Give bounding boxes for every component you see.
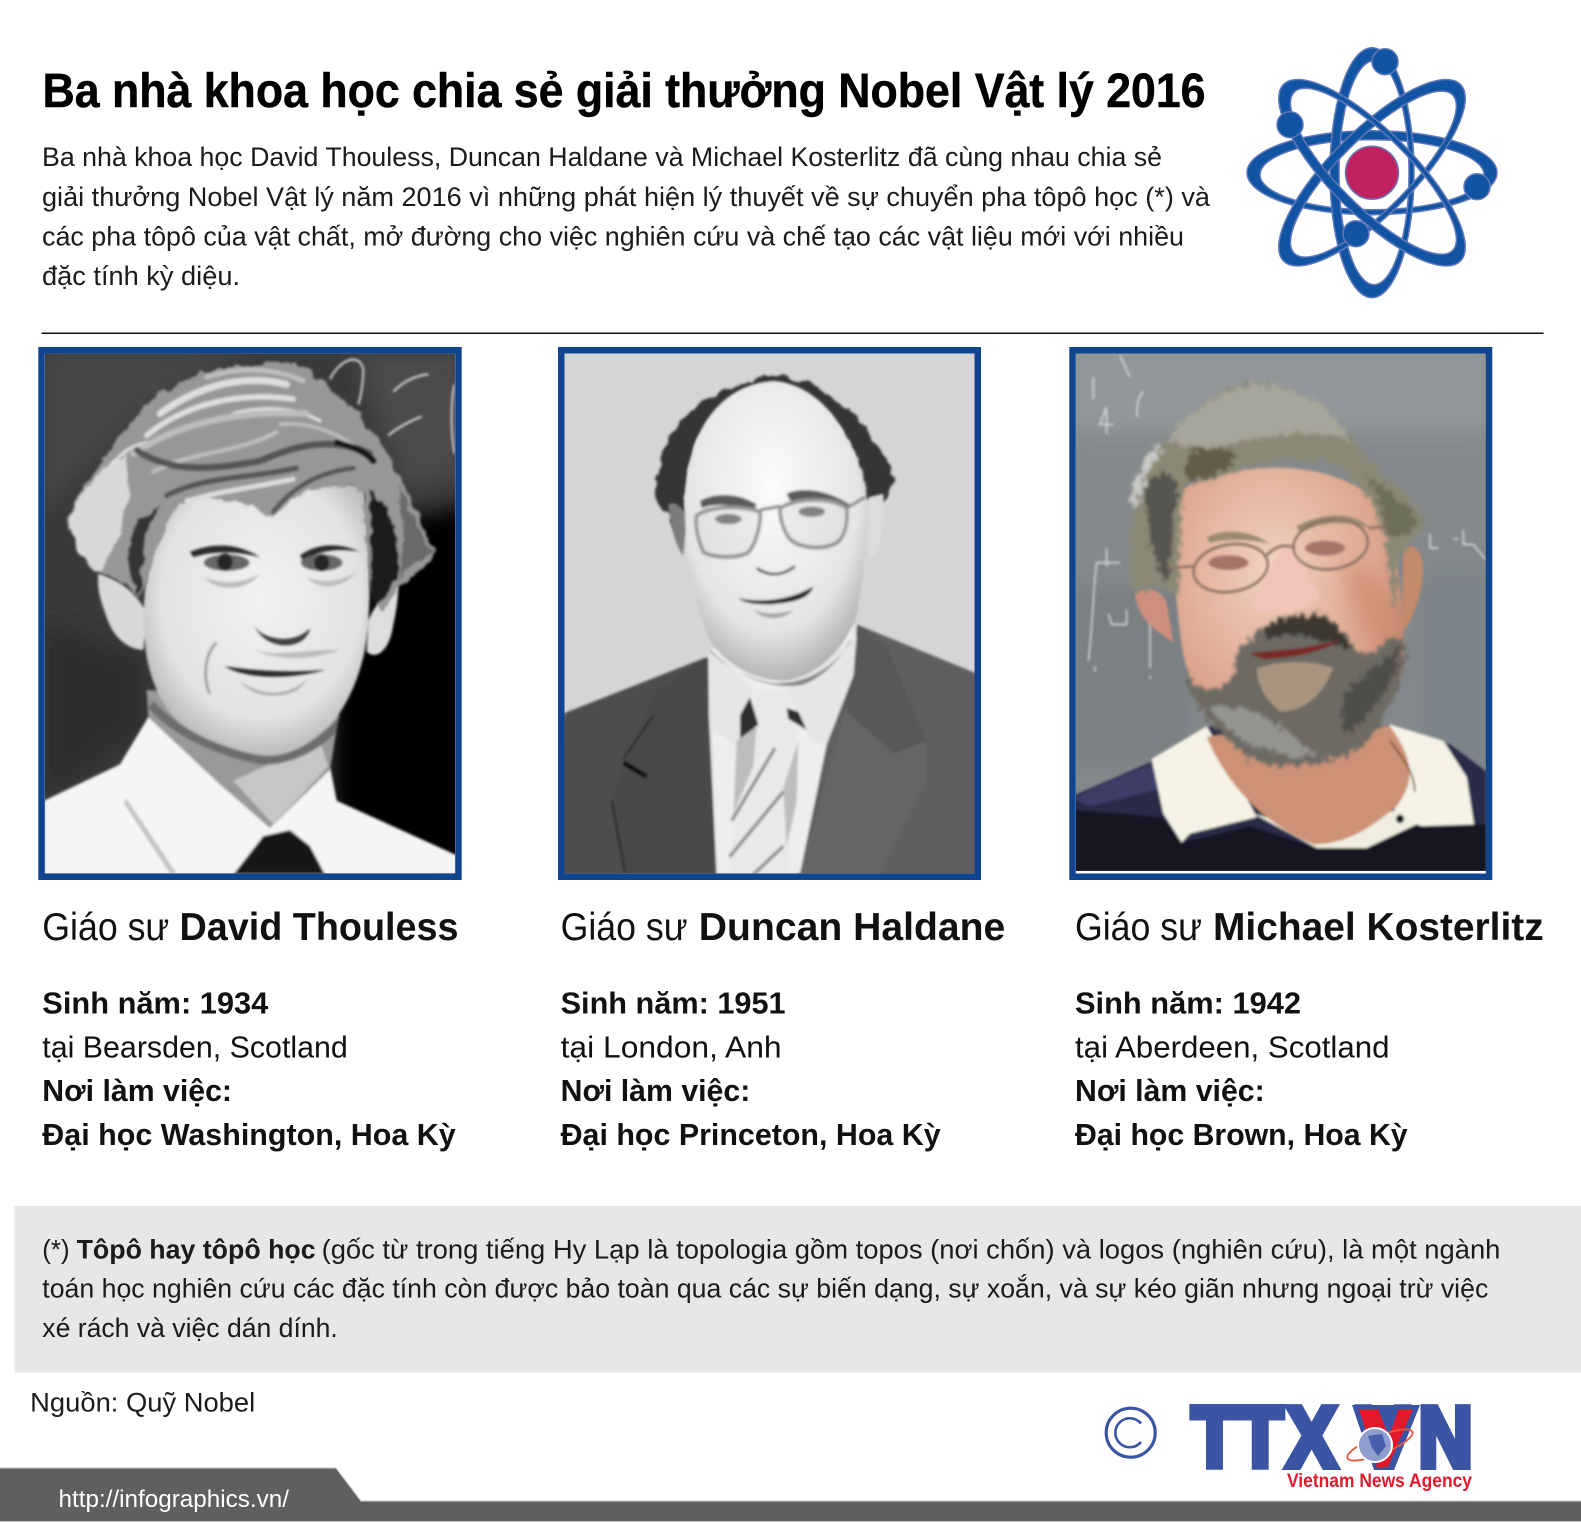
name: Michael Kosterlitz: Michael Kosterlitz	[1213, 906, 1544, 949]
logo V and globe	[1344, 1409, 1416, 1467]
details: Duncan Haldane: tại London, Anh	[561, 1030, 782, 1064]
details: Duncan Haldane: Sinh năm: 1951	[561, 985, 786, 1020]
details: Michael Kosterlitz: Nơi làm việc:	[1075, 1073, 1265, 1108]
note text: (gốc từ trong tiếng Hy Lạp là topologia gồm topos (nơi chốn) và logos (nghiên cứu), là một ngành	[322, 1234, 1500, 1264]
intro text block: Ba nhà khoa học David Thouless, Duncan Haldane và Michael Kosterlitz đã cùng nhau chia sẻ	[42, 142, 1162, 172]
logo letters: TTXVN	[1192, 1390, 1473, 1485]
name: Duncan Haldane: Giáo sư	[561, 906, 688, 949]
details: David Thouless: Nơi làm việc:	[42, 1073, 232, 1108]
source: Nguồn: Quỹ Nobel	[30, 1388, 255, 1418]
intro text block: giải thưởng Nobel Vật lý năm 2016 vì những phát hiện lý thuyết về sự chuyển pha tôpô học (*) và	[42, 182, 1211, 212]
details: David Thouless: tại Bearsden, Scotland	[42, 1030, 348, 1064]
note background	[14, 1206, 1581, 1372]
photo: Michael Kosterlitz	[1070, 341, 1493, 879]
intro text block: đặc tính kỳ diệu.	[42, 261, 240, 291]
name: David Thouless	[42, 906, 459, 949]
logo: TTXVN	[1106, 1390, 1473, 1492]
hair	[68, 363, 437, 610]
hair	[1130, 383, 1423, 621]
beard	[1183, 615, 1407, 766]
details: Michael Kosterlitz	[1075, 985, 1408, 1152]
url: http://infographics.vn/	[58, 1486, 289, 1513]
name: Duncan Haldane: Duncan Haldane	[699, 906, 1005, 949]
name: David Thouless: Giáo sư	[42, 906, 169, 949]
note text: (*)	[42, 1234, 70, 1264]
intro text block: các pha tôpô của vật chất, mở đường cho việc nghiên cứu và chế tạo các vật liệu mới với nhiều	[42, 222, 1184, 252]
photo: Duncan Haldane	[560, 348, 980, 879]
note text: xé rách và việc dán dính.	[42, 1313, 338, 1343]
details: Michael Kosterlitz: Đại học Brown, Hoa Kỳ	[1075, 1117, 1408, 1152]
name: Duncan Haldane	[561, 906, 1005, 949]
details: Duncan Haldane	[561, 985, 941, 1152]
panel: Michael Kosterlitz	[1070, 341, 1544, 1152]
photo: David Thouless	[40, 348, 480, 897]
details: David Thouless: Sinh năm: 1934	[42, 985, 269, 1020]
note text	[42, 1234, 1500, 1343]
hair	[657, 375, 895, 537]
panel: Duncan Haldane	[560, 348, 1005, 1152]
face features	[190, 545, 360, 696]
details: Michael Kosterlitz: Sinh năm: 1942	[1075, 985, 1301, 1020]
details: Duncan Haldane: Nơi làm việc:	[561, 1073, 750, 1108]
intro text block	[42, 142, 1211, 291]
footer bar	[0, 1468, 1581, 1522]
icon: copyright	[1106, 1408, 1155, 1457]
photo frame	[42, 350, 458, 877]
divider	[42, 332, 1544, 334]
details: David Thouless: Đại học Washington, Hoa Kỳ	[42, 1117, 456, 1152]
photo frame	[1073, 350, 1489, 877]
name: David Thouless: David Thouless	[180, 906, 458, 949]
details: Duncan Haldane: Đại học Princeton, Hoa Kỳ	[561, 1117, 941, 1152]
panel: David Thouless	[40, 348, 480, 1152]
photo frame	[561, 350, 978, 877]
note text: toán học nghiên cứu các đặc tính còn được bảo toàn qua các sự biến dạng, sự xoắn, và sự kéo giãn nhưng ngoại trừ việc	[42, 1273, 1488, 1304]
details: David Thouless	[42, 985, 456, 1152]
name: Michael Kosterlitz: Giáo sư	[1075, 906, 1202, 949]
details: Michael Kosterlitz: tại Aberdeen, Scotland	[1075, 1030, 1390, 1064]
icon: atom	[1247, 48, 1497, 298]
panel: topology note	[14, 1206, 1581, 1372]
agency name: Vietnam News Agency	[1287, 1471, 1472, 1492]
note text: Tôpô hay tôpô học	[77, 1234, 316, 1264]
title: Ba nhà khoa học chia sẻ giải thưởng Nobel Vật lý 2016	[42, 65, 1206, 118]
